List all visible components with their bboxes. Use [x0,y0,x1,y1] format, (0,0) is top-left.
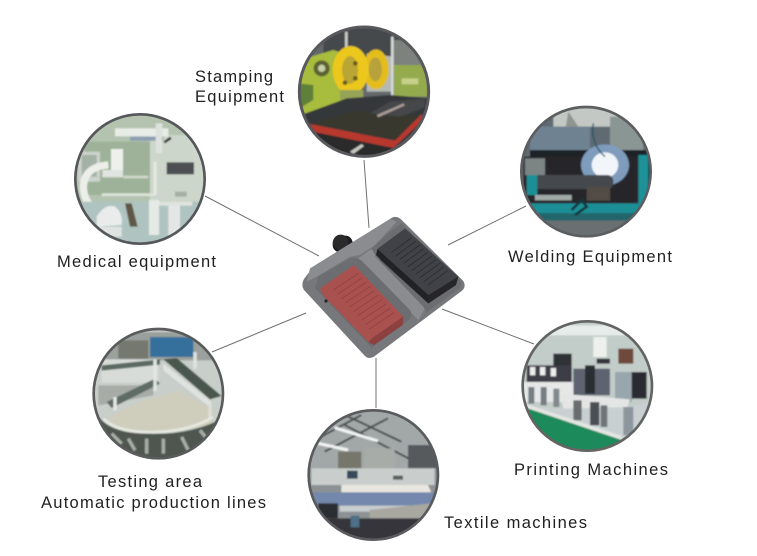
label: textile machines: Textile machines [444,514,587,532]
black pedal [376,228,458,303]
label: stamping equipment: Equipment [195,88,284,106]
cable gland [333,235,353,252]
label: stamping equipment [195,68,284,106]
photo: welding equipment [520,106,652,238]
label: stamping equipment: Stamping [195,68,273,86]
foot pedal switch [302,217,465,358]
connector lines [205,160,534,408]
photo: medical equipment [74,113,206,245]
label: testing area: Testing area [98,473,203,491]
red pedal [320,265,403,345]
photo: stamping equipment [298,26,430,158]
label: welding equipment: Welding Equipment [508,248,672,266]
pedal base [302,217,465,358]
label: testing area: Automatic production lines [41,494,266,512]
label: medical equipment: Medical equipment [57,253,216,271]
label: testing area [41,473,266,512]
label: printing machines: Printing Machines [514,461,668,479]
photo: printing machines [521,320,654,452]
photo: textile machines [307,409,440,541]
photo: testing area conveyor [92,328,224,460]
